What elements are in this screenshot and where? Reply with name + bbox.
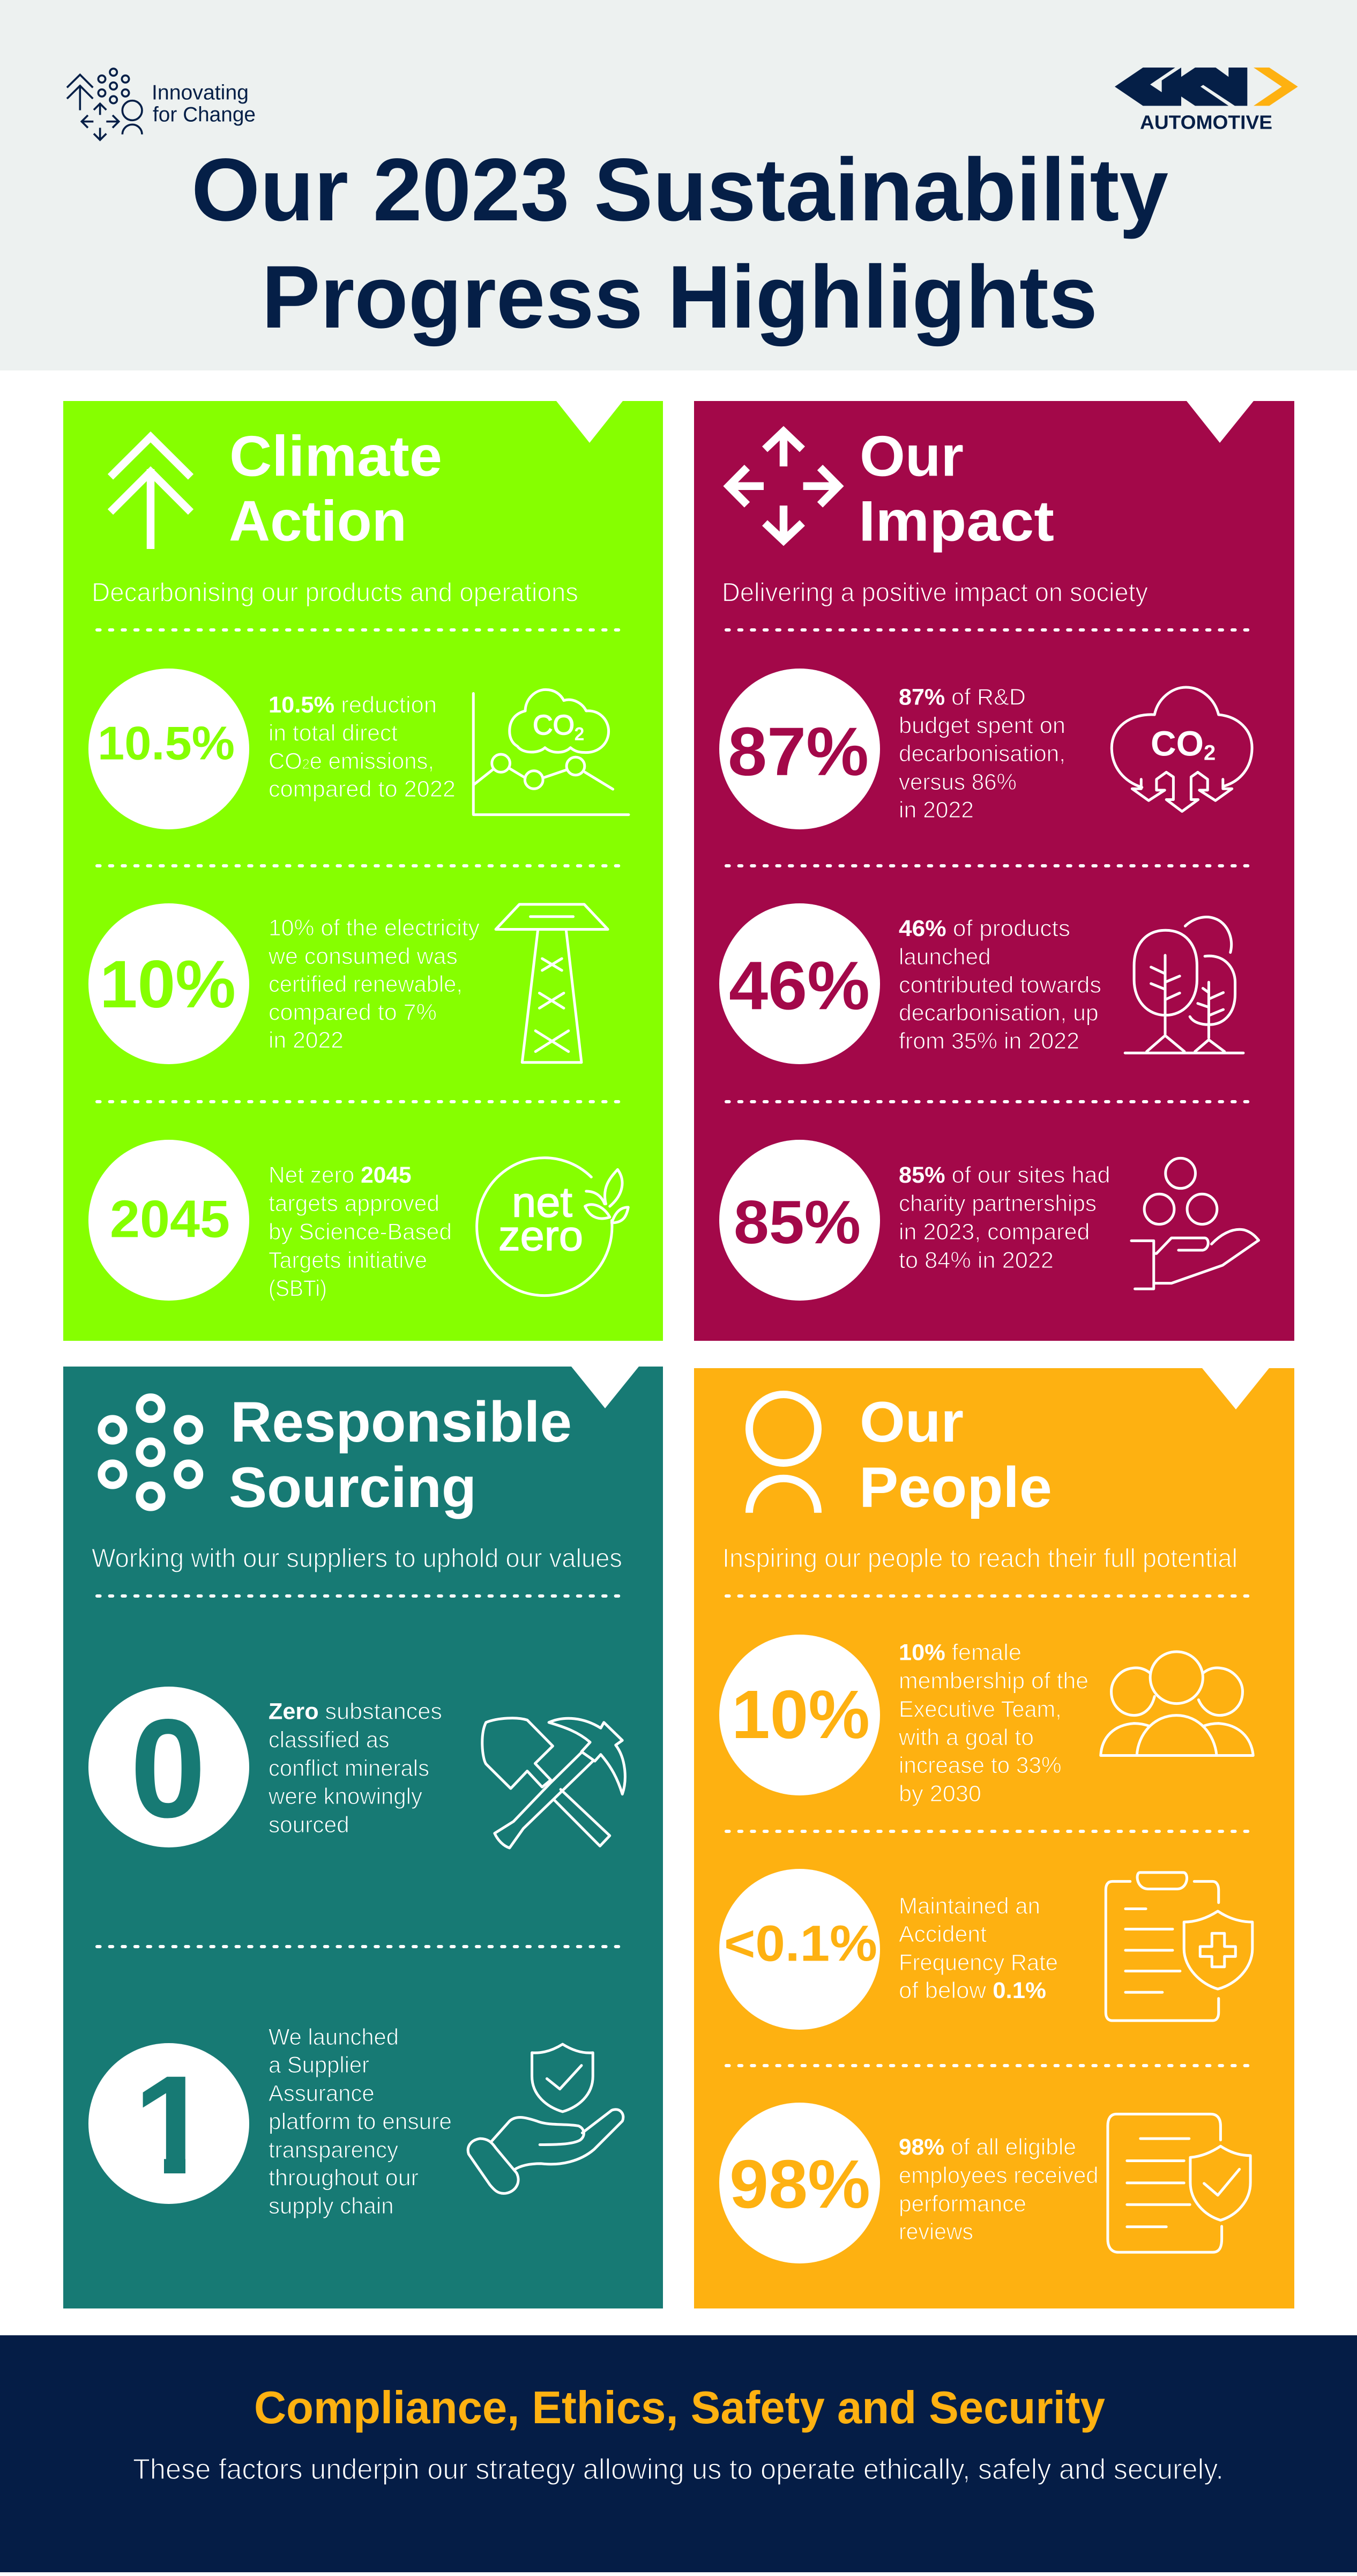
text: products launched: decarbonisation, up	[899, 1000, 1099, 1026]
heading: Impact	[859, 489, 1054, 553]
logo: Innovating for Change	[67, 69, 256, 140]
stat: 1: 1	[133, 2046, 211, 2203]
icon: shovel and pickaxe	[482, 1718, 625, 1848]
icon: hand with shield	[468, 2044, 623, 2193]
stat: 10%: 10%	[732, 1676, 870, 1753]
logo icon mark	[67, 69, 142, 140]
text: R&D budget: budget spent on	[899, 712, 1065, 738]
heading: Our	[860, 424, 964, 488]
stat: 0	[88, 1687, 249, 1847]
icon: trees	[1125, 917, 1243, 1053]
text: net zero targets: targets approved	[269, 1191, 439, 1216]
icon: CO2 chart	[473, 689, 629, 815]
icon: net zero leaf	[477, 1158, 628, 1296]
title	[191, 140, 1168, 347]
stat: 2045: 2045	[110, 1190, 230, 1249]
text: net zero targets	[269, 1162, 452, 1302]
text: renewable electricity: in 2022	[269, 1028, 344, 1053]
text: charity partnerships	[899, 1162, 1110, 1273]
icon: four directional arrows	[729, 432, 838, 540]
heading: People	[859, 1455, 1052, 1519]
icon: net zero leaf: zero	[498, 1212, 583, 1259]
text: emissions reduction	[269, 692, 456, 802]
text: renewable electricity: 10% of the electricity	[269, 915, 480, 941]
text: emissions reduction: 10.5% reduction	[269, 692, 437, 718]
text: female membership: 10% female	[899, 1640, 1022, 1666]
text: charity partnerships: charity partnerships	[899, 1191, 1097, 1216]
stat: 10%: 10%	[100, 947, 236, 1022]
panel: Our Impact	[694, 401, 1294, 1341]
icon: group of people	[1101, 1652, 1253, 1755]
logo wording	[152, 81, 256, 127]
stat: 10.5%	[88, 669, 249, 829]
heading	[859, 1390, 1052, 1519]
stat: 2045	[88, 1140, 249, 1301]
icon: net zero leaf: net	[512, 1178, 572, 1226]
stat: 10%	[719, 1635, 880, 1795]
text: supplier assurance: Assurance	[269, 2081, 375, 2106]
text: female membership: with a goal to	[898, 1725, 1034, 1750]
stat: 10%	[88, 903, 249, 1064]
heading: Climate	[229, 424, 442, 488]
icon: person	[749, 1394, 818, 1513]
text: accident frequency: Accident	[899, 1921, 987, 1947]
panel: Responsible Sourcing	[63, 1367, 663, 2308]
text: performance reviews: reviews	[899, 2219, 973, 2245]
stat: <0.1%	[719, 1869, 880, 2030]
text: products launched: from 35% in 2022	[899, 1028, 1079, 1054]
text: conflict minerals: were knowingly	[268, 1784, 422, 1809]
text: female membership	[898, 1640, 1088, 1807]
icon: document with check shield	[1108, 2114, 1250, 2252]
stat: 46%	[719, 903, 880, 1064]
subtitle: Decarbonising our products and operations	[92, 578, 578, 607]
text: supplier assurance: throughout our	[269, 2165, 419, 2191]
text: female membership: membership of the	[899, 1668, 1088, 1694]
icon: clipboard with medical shield	[1106, 1873, 1252, 2021]
text: conflict minerals: conflict minerals	[269, 1755, 429, 1781]
text: net zero targets: Targets initiative	[269, 1248, 427, 1273]
icon: hand holding circles	[1131, 1158, 1259, 1289]
icon: electricity pylon	[496, 904, 608, 1063]
header band	[0, 0, 1357, 370]
heading	[229, 424, 442, 553]
GKN mark	[1115, 68, 1298, 106]
stat: 87%: 87%	[728, 714, 869, 790]
stat: 87%	[719, 669, 880, 829]
Automotive wording: AUTOMOTIVE	[1140, 112, 1272, 133]
panel: Climate Action	[63, 401, 663, 1341]
text: supplier assurance: transparency	[269, 2137, 398, 2163]
panel: Our People	[694, 1368, 1294, 2308]
text: R&D budget: in 2022	[899, 797, 974, 823]
stat: 85%: 85%	[734, 1189, 861, 1257]
text: conflict minerals: classified as	[269, 1727, 390, 1753]
text: supplier assurance: a Supplier	[269, 2052, 369, 2078]
subtitle: Working with our suppliers to uphold our values	[92, 1544, 622, 1573]
subtitle: Inspiring our people to reach their full potential	[722, 1544, 1237, 1573]
icon: double chevron arrow up	[110, 437, 191, 549]
text: net zero targets: by Science-Based	[269, 1219, 452, 1245]
text: R&D budget: versus 86%	[899, 769, 1017, 795]
text: emissions reduction: compared to 2022	[269, 776, 456, 802]
text: performance reviews: performance	[899, 2191, 1026, 2217]
text: products launched: 46% of products	[899, 916, 1070, 941]
text: R&D budget	[899, 685, 1065, 823]
text: performance reviews	[899, 2134, 1099, 2245]
subtitle: Delivering a positive impact on society	[722, 578, 1148, 607]
logo wording: Innovating	[152, 81, 249, 104]
text: R&D budget: decarbonisation,	[899, 741, 1065, 767]
text: charity partnerships: in 2023, compared	[899, 1219, 1090, 1245]
text: female membership: increase to 33%	[899, 1753, 1062, 1778]
footer band	[0, 2335, 1357, 2572]
text: conflict minerals	[268, 1699, 442, 1838]
icon: CO2 chart: CO	[533, 710, 575, 741]
stat: 0: 0	[130, 1690, 206, 1847]
stat: 98%: 98%	[729, 2146, 870, 2223]
icon: CO2 cloud with down arrows	[1112, 687, 1252, 811]
text: conflict minerals: Zero substances	[269, 1699, 442, 1725]
heading: Responsible	[230, 1390, 572, 1454]
heading	[229, 1390, 572, 1519]
text: charity partnerships: 85% of our sites had	[899, 1162, 1110, 1188]
text: accident frequency: of below 0.1%	[899, 1978, 1046, 2003]
text: accident frequency: Frequency Rate	[899, 1950, 1058, 1976]
icon: CO2 chart: 2	[575, 724, 584, 744]
stat: 46%: 46%	[729, 947, 870, 1024]
text: performance reviews: employees received	[899, 2163, 1099, 2188]
icon: ring cluster	[101, 1397, 199, 1508]
footer text: These factors underpin our strategy allowing us to operate ethically, safely and securely.	[133, 2453, 1224, 2485]
icon: CO2 cloud with down arrows: 2	[1204, 741, 1216, 765]
logo: GKN Automotive	[1115, 68, 1298, 133]
heading: Action	[229, 489, 407, 553]
text: supplier assurance	[269, 2024, 452, 2219]
text: female membership: by 2030	[899, 1781, 981, 1807]
heading: Our	[860, 1390, 964, 1454]
text: R&D budget: 87% of R&D	[899, 685, 1026, 710]
text: products launched	[899, 916, 1101, 1054]
text: supplier assurance: platform to ensure	[269, 2109, 452, 2135]
text: accident frequency: Maintained an	[899, 1893, 1040, 1919]
text: net zero targets: Net zero 2045	[269, 1162, 412, 1188]
footer heading: Compliance, Ethics, Safety and Security	[254, 2382, 1105, 2433]
heading	[859, 424, 1054, 553]
text: supplier assurance: We launched	[269, 2024, 399, 2050]
title: Progress Highlights	[262, 248, 1098, 347]
text: conflict minerals: sourced	[269, 1812, 349, 1838]
text: female membership: Executive Team,	[899, 1696, 1062, 1722]
stat: 1	[88, 2043, 249, 2204]
text: performance reviews: 98% of all eligible	[899, 2134, 1076, 2160]
logo wording: for Change	[153, 103, 256, 127]
icon: CO2 cloud with down arrows: CO	[1151, 724, 1204, 763]
text: net zero targets: (SBTi)	[269, 1276, 327, 1302]
text: emissions reduction: CO2e emissions,	[269, 748, 434, 774]
text: charity partnerships: to 84% in 2022	[899, 1248, 1054, 1273]
text: renewable electricity: compared to 7%	[269, 1000, 437, 1026]
text: emissions reduction: in total direct	[269, 721, 398, 746]
stat: 85%	[719, 1140, 880, 1301]
text: renewable electricity: we consumed was	[268, 944, 458, 969]
heading: Sourcing	[229, 1455, 476, 1519]
text: renewable electricity	[268, 915, 480, 1053]
stat: <0.1%: <0.1%	[724, 1915, 877, 1972]
text: products launched: contributed towards	[899, 973, 1101, 998]
text: accident frequency	[899, 1893, 1058, 2003]
title: Our 2023 Sustainability	[191, 140, 1168, 240]
stat: 98%	[719, 2103, 880, 2263]
text: products launched: launched	[899, 944, 991, 970]
text: renewable electricity: certified renewable,	[269, 971, 463, 997]
text: supplier assurance: supply chain	[269, 2193, 394, 2219]
stat: 10.5%: 10.5%	[98, 717, 235, 770]
